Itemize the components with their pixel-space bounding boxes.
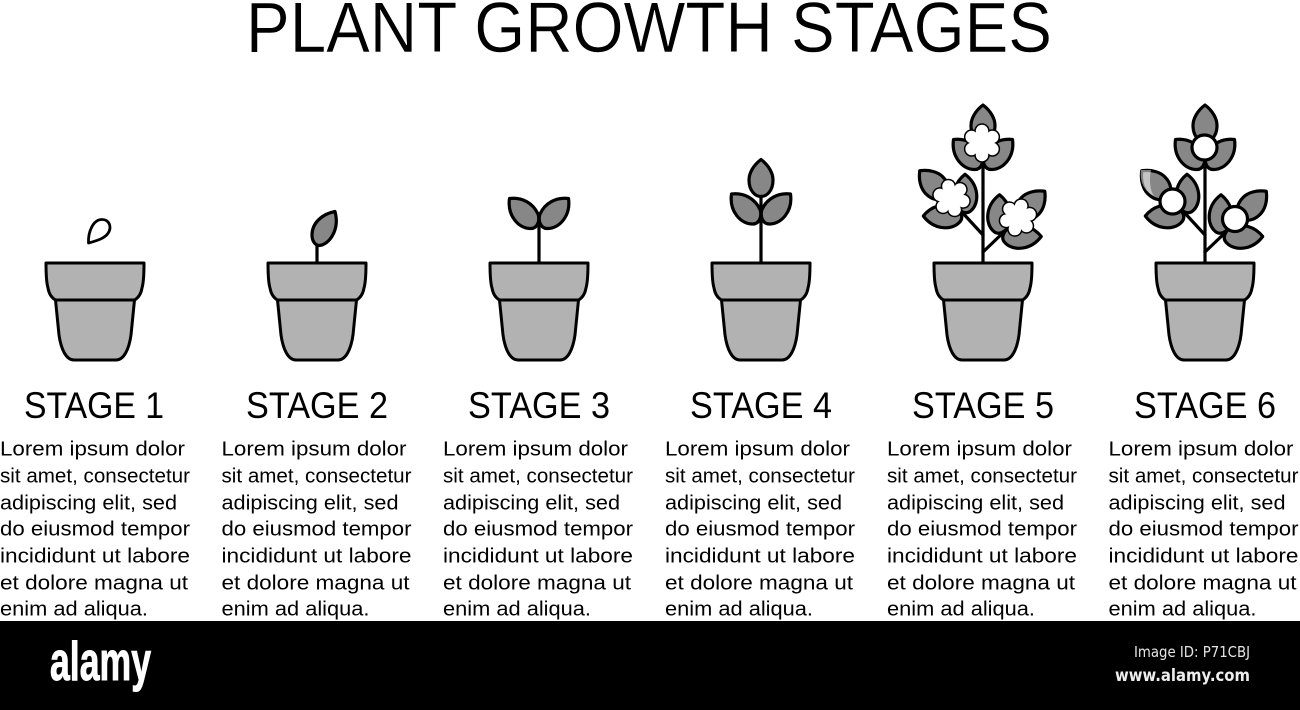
- text block: stage 2: incididunt ut labore: [222, 546, 412, 568]
- icon: plant with three leaves: [731, 160, 791, 263]
- icon: plant with round buds: [1121, 105, 1287, 263]
- text block: stage 1: enim ad aliqua.: [0, 599, 148, 621]
- text block: stage 6: Lorem ipsum dolor: [1108, 439, 1294, 461]
- text block: stage 6: incididunt ut labore: [1108, 546, 1298, 568]
- text block: stage 3: Lorem ipsum dolor: [443, 439, 628, 461]
- image id: Image ID: P71CBJ: [1134, 643, 1250, 661]
- text block: stage 2: do eiusmod tempor: [222, 519, 412, 541]
- icon: seedling with two leaves: [509, 198, 569, 263]
- text block: stage 4: et dolore magna ut: [665, 573, 853, 595]
- text block: stage 3: sit amet, consectetur: [443, 466, 633, 488]
- text block: stage 2: adipiscing elit, sed: [222, 493, 398, 515]
- text block: stage 2: et dolore magna ut: [222, 573, 410, 595]
- heading: stage 1: STAGE 1: [24, 385, 164, 426]
- icon: pot: [490, 263, 588, 360]
- icon: pot: [1156, 263, 1254, 360]
- text block: stage 5: sit amet, consectetur: [887, 466, 1077, 488]
- panel: stage 1: [0, 220, 190, 621]
- text block: stage 3: [443, 439, 633, 621]
- icon: pot: [712, 263, 810, 360]
- text block: stage 4: Lorem ipsum dolor: [665, 439, 850, 461]
- text block: stage 3: enim ad aliqua.: [443, 599, 591, 621]
- text block: stage 2: sit amet, consectetur: [222, 466, 412, 488]
- text block: stage 5: enim ad aliqua.: [887, 599, 1035, 621]
- text block: stage 1: [0, 439, 190, 621]
- text block: stage 1: sit amet, consectetur: [0, 466, 190, 488]
- footer banner: [0, 621, 1300, 710]
- text block: stage 3: et dolore magna ut: [443, 573, 631, 595]
- text block: stage 1: do eiusmod tempor: [0, 519, 190, 541]
- website: www.alamy.com: [1115, 666, 1250, 686]
- panel: stage 6: [1108, 105, 1299, 621]
- panel: stage 4: [665, 160, 855, 621]
- text block: stage 1: et dolore magna ut: [0, 573, 188, 595]
- text block: stage 3: adipiscing elit, sed: [443, 493, 620, 515]
- text block: stage 5: et dolore magna ut: [887, 573, 1075, 595]
- text block: stage 1: incididunt ut labore: [0, 546, 190, 568]
- text block: stage 5: incididunt ut labore: [887, 546, 1077, 568]
- icon: pot: [46, 263, 144, 360]
- heading: stage 6: STAGE 6: [1134, 385, 1276, 426]
- text block: stage 6: et dolore magna ut: [1108, 573, 1297, 595]
- text block: stage 2: enim ad aliqua.: [222, 599, 370, 621]
- text block: stage 1: adipiscing elit, sed: [0, 493, 177, 515]
- icon: seed: [88, 220, 110, 243]
- text block: stage 4: enim ad aliqua.: [665, 599, 813, 621]
- heading: stage 3: STAGE 3: [468, 385, 610, 426]
- text block: stage 5: adipiscing elit, sed: [887, 493, 1064, 515]
- logo: alamy: alamy: [50, 630, 151, 692]
- heading: stage 5: STAGE 5: [912, 385, 1054, 426]
- text block: stage 5: Lorem ipsum dolor: [887, 439, 1072, 461]
- text block: stage 5: do eiusmod tempor: [887, 519, 1077, 541]
- text block: stage 2: Lorem ipsum dolor: [222, 439, 407, 461]
- text block: stage 4: adipiscing elit, sed: [665, 493, 842, 515]
- text block: stage 6: enim ad aliqua.: [1108, 599, 1256, 621]
- heading: stage 4: STAGE 4: [690, 385, 832, 426]
- panel: stage 2: [222, 212, 412, 621]
- text block: stage 3: incididunt ut labore: [443, 546, 633, 568]
- heading: stage 2: STAGE 2: [246, 385, 388, 426]
- text block: stage 6: [1108, 439, 1299, 621]
- text block: stage 1: Lorem ipsum dolor: [0, 439, 185, 461]
- panel: stage 5: [887, 105, 1077, 621]
- icon: sprout with one leaf: [312, 212, 336, 263]
- text block: stage 3: do eiusmod tempor: [443, 519, 633, 541]
- text block: stage 6: adipiscing elit, sed: [1108, 493, 1286, 515]
- text block: stage 4: [665, 439, 855, 621]
- icon: flowering plant with petalled blooms: [899, 105, 1066, 263]
- panel: stage 3: [443, 198, 633, 621]
- icon: pot: [268, 263, 366, 360]
- text block: stage 2: [222, 439, 412, 621]
- text block: stage 4: incididunt ut labore: [665, 546, 855, 568]
- text block: stage 4: sit amet, consectetur: [665, 466, 855, 488]
- icon: pot: [934, 263, 1032, 360]
- text block: stage 4: do eiusmod tempor: [665, 519, 855, 541]
- text block: stage 6: do eiusmod tempor: [1108, 519, 1299, 541]
- text block: stage 6: sit amet, consectetur: [1108, 466, 1299, 488]
- text block: stage 5: [887, 439, 1077, 621]
